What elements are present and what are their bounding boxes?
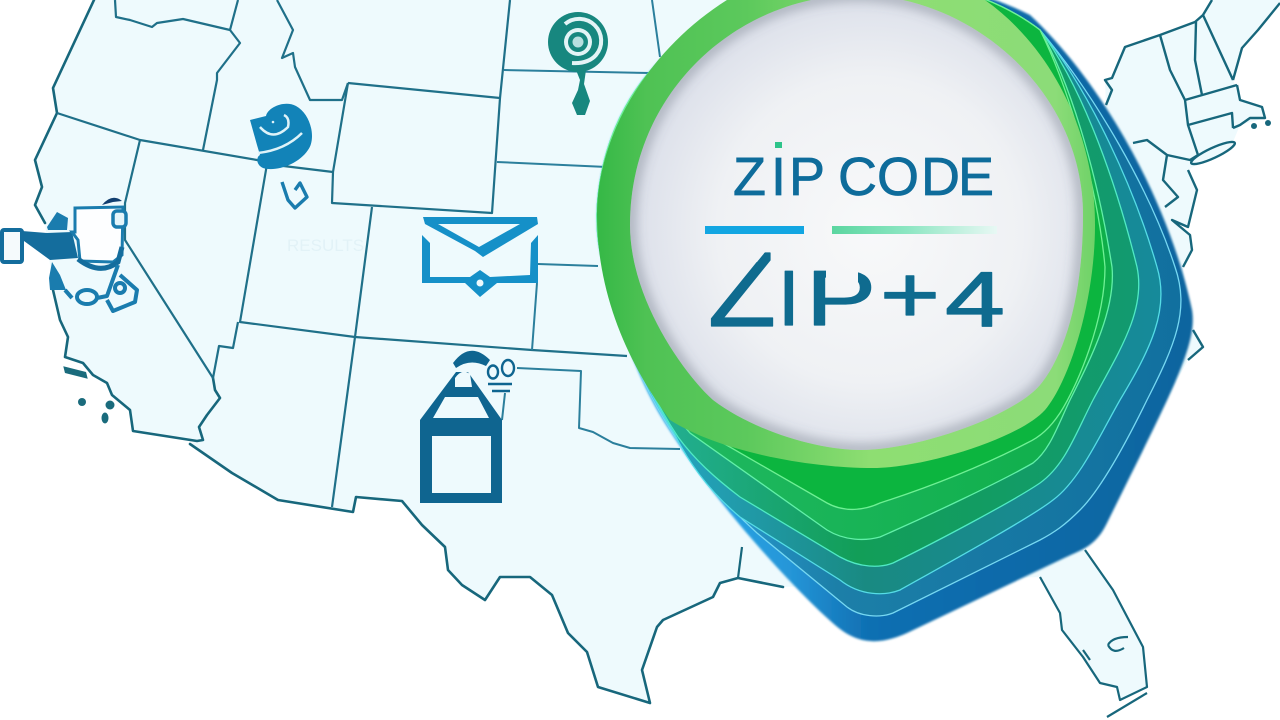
heading: ZIP CODE: ZIP CODE: [733, 147, 994, 207]
heading: ZIP+4: P: [806, 254, 876, 342]
heading: ZIP+4: [710, 252, 1003, 327]
mailbox chain: [65, 265, 137, 311]
mailbox base blob: [49, 262, 66, 290]
state borders central: [497, 0, 680, 449]
northeast state outlines: [1105, 0, 1280, 360]
light green ring: [597, 0, 1095, 468]
california islands: [65, 368, 114, 424]
state borders west: [57, 0, 627, 378]
green fading divider bar: [832, 226, 997, 234]
florida outline: [738, 547, 1147, 717]
mailbox top cap: [102, 198, 122, 205]
long island: [1189, 138, 1237, 168]
mailbox box: [72, 207, 123, 262]
icon: envelope: [422, 217, 538, 297]
location pin with layered rings: [597, 0, 1193, 641]
green dot above the I: [775, 142, 782, 148]
inner shadow on face: [630, 0, 1083, 450]
mailbox dome: [47, 212, 68, 230]
heading: ZIP+4: +: [880, 250, 940, 339]
outer blue layer: [597, 0, 1193, 641]
blue divider bar: [705, 226, 804, 234]
icon: small clip: [282, 182, 307, 208]
wyoming and colorado borders: [332, 0, 510, 507]
mailbox dark body: [22, 231, 78, 260]
icon: helmet: [250, 104, 312, 169]
cape islands: [1251, 120, 1271, 129]
layer three: [597, 0, 1139, 566]
icon: mailbox: [2, 198, 137, 311]
mailbox small window: [2, 230, 22, 262]
west coast and southern border outline: [35, 0, 783, 703]
white circle face: [630, 0, 1083, 450]
icon: target pin: [548, 12, 608, 115]
heading: ZIP+4: 4: [945, 255, 1005, 343]
mailbox base arc: [78, 247, 122, 268]
layer two: [597, 0, 1112, 539]
heading: ZIP+4: I: [778, 254, 800, 342]
layer five: [597, 0, 1181, 616]
heading: ZIP+4: Z: [708, 231, 776, 349]
house roof details: [453, 351, 490, 368]
layer four: [597, 0, 1161, 594]
mailbox flag ring: [113, 211, 126, 227]
layer one: [597, 0, 1105, 509]
icon: house: [420, 351, 514, 503]
faint label on map: RESULTS: [287, 236, 364, 255]
